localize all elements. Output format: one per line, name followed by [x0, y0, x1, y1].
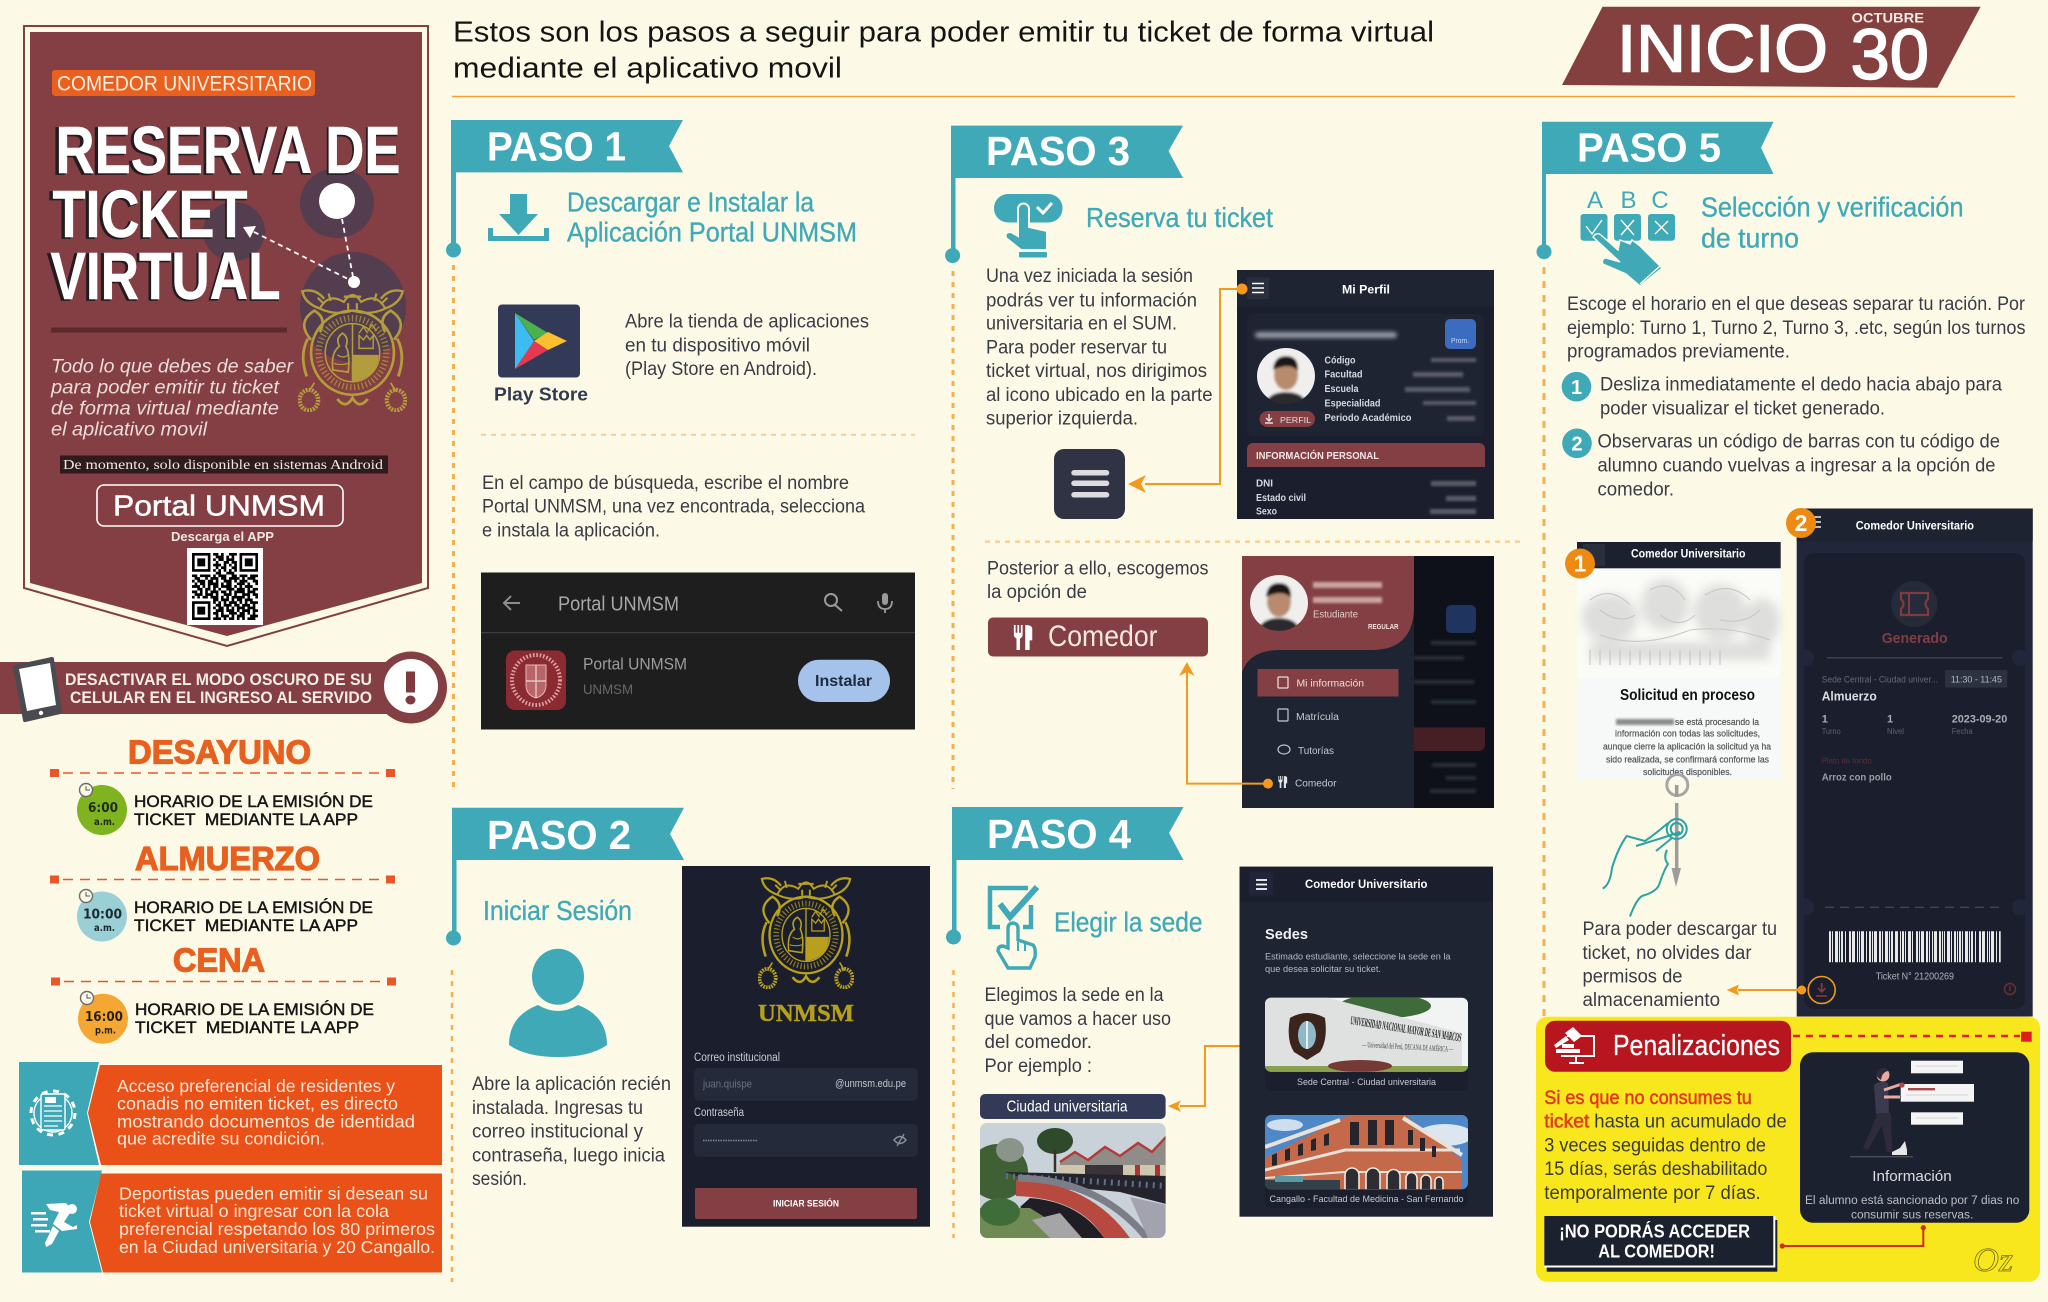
portal unmsm label — [97, 485, 343, 526]
tagline: Todo lo que debes de saber — [51, 356, 295, 378]
flag: paso 4 — [946, 807, 1184, 944]
screenshot: login: Contraseña — [694, 1107, 744, 1119]
panel: schedule almuerzo — [50, 840, 395, 942]
screenshot: request in process: aunque cierre la aplicación la solicitud ya ha — [1603, 741, 1771, 751]
text: schedule: programados previamente. — [1567, 342, 1790, 363]
screenshot: login: INICIAR SESIÓN — [773, 1198, 839, 1210]
text: profile: Para poder reservar tu — [986, 337, 1167, 358]
screenshot: profile: Facultad — [1324, 370, 1362, 381]
text: penalty rule: 3 veces seguidas dentro de — [1544, 1135, 1766, 1157]
badge: inicio octubre 30: INICIO — [1617, 12, 1828, 87]
text: penalty rule: ticket — [1544, 1111, 1590, 1133]
connector: callout to screen — [1780, 1225, 1926, 1249]
text: penalty rule: Si es que no consumes tu — [1544, 1087, 1752, 1109]
tagline — [50, 356, 295, 440]
text: profile: ticket virtual, nos dirigimos — [986, 361, 1207, 382]
screenshot: profile: INFORMACIÓN PERSONAL — [1256, 449, 1379, 462]
description — [134, 898, 373, 935]
text: conadis no emiten ticket, es directo — [117, 1094, 398, 1114]
step 2: Observaras un código de barras con tu código de — [1598, 432, 2000, 453]
callout: no access: AL COMEDOR! — [1598, 1241, 1715, 1261]
screenshot: generated ticket: Plato de fondo — [1822, 757, 1872, 766]
badge: inicio octubre 30: OCTUBRE — [1852, 10, 1924, 26]
tagline: de forma virtual mediante — [51, 398, 279, 420]
text: choose comedor: la opción de — [987, 582, 1087, 603]
time badge — [77, 784, 127, 835]
screenshot: request in process: se está procesando la — [1675, 717, 1759, 727]
heading — [1701, 192, 1964, 253]
panel: penalizaciones — [1536, 1017, 2040, 1282]
flag: paso 3 — [945, 126, 1183, 263]
icon: play store — [498, 304, 580, 378]
heading: Reserva tu ticket — [1086, 202, 1273, 233]
time badge: 6:00 — [88, 801, 118, 816]
screenshot: profile: Prom. — [1451, 338, 1469, 345]
screenshot: menu: Tutorías — [1298, 746, 1334, 757]
screenshot: generated ticket: Fecha — [1952, 727, 1973, 736]
description: TICKET MEDIANTE LA APP — [134, 917, 358, 935]
header text: Estos son los pasos a seguir para poder emitir tu ticket de forma virtual — [453, 16, 1434, 48]
text: profile: superior izquierda. — [986, 408, 1138, 430]
text: schedule — [1567, 294, 2026, 363]
photo: ciudad universitaria — [968, 1123, 1166, 1238]
step 1 — [1562, 372, 2002, 420]
arrow: download permissions — [1727, 984, 1806, 996]
screenshot: generated ticket: Almuerzo — [1822, 689, 1877, 703]
screenshot: generated ticket: Turno — [1822, 727, 1841, 736]
screenshot: generated ticket: Comedor Universitario — [1856, 521, 1974, 533]
badge 2: 2 — [1795, 510, 1807, 536]
panel: paso 2 — [446, 808, 930, 1282]
screenshot: login: juan.quispe — [702, 1079, 752, 1091]
text: en la Ciudad universitaria y 20 Cangallo. — [119, 1237, 435, 1257]
time badge: 16:00 — [85, 1010, 123, 1025]
title: RESERVA DE — [52, 114, 400, 189]
badge 1: 1 — [1574, 550, 1587, 576]
header text — [453, 16, 1434, 84]
screenshot: generated ticket: Nivel — [1887, 727, 1904, 736]
flag: paso 5 — [1536, 122, 1774, 259]
text: login: Abre la aplicación recién — [472, 1074, 671, 1095]
icon: abc choice: B — [1620, 187, 1637, 214]
text: login: instalada. Ingresas tu — [472, 1098, 643, 1119]
text: choose comedor — [987, 559, 1208, 603]
button: comedor — [988, 618, 1208, 656]
text: Deportistas pueden emitir si desean su — [119, 1184, 428, 1204]
screenshot: sedes: Sede Central - Ciudad universitaria — [1297, 1077, 1437, 1088]
screenshot: request in process: Solicitud en proceso — [1620, 687, 1755, 704]
caption: play store: Play Store — [494, 384, 588, 404]
badge 2 — [1786, 508, 1816, 538]
icon: menu button — [1054, 449, 1125, 519]
screenshot: generated ticket: Ticket N° 21200269 — [1876, 971, 1954, 982]
text: penalty rule — [1544, 1087, 1787, 1204]
text: login — [472, 1074, 671, 1190]
time badge: a.m. — [94, 923, 115, 934]
tagline: para poder emitir tu ticket — [50, 376, 281, 398]
screenshot: profile: PERFIL — [1280, 415, 1311, 425]
screenshot: generated ticket — [1797, 508, 2033, 1016]
icon: tap check — [994, 194, 1062, 258]
step 2: 2 — [1571, 434, 1583, 456]
screenshot: store search — [481, 572, 915, 730]
icon: swipe gesture — [1603, 774, 1688, 916]
text: Acceso preferencial de residentes y — [117, 1076, 395, 1096]
infographic canvas: UNIVERSIDAD NACIONAL MAYOR DE SAN MARCOS — [1350, 1013, 1462, 1045]
heading: DESAYUNO — [128, 734, 311, 770]
text: login: contraseña, luego inicia — [472, 1146, 665, 1167]
android notice: De momento, solo disponible en sistemas Android — [63, 458, 383, 473]
panel: athletes — [22, 1170, 442, 1272]
screenshot: request in process — [1577, 542, 1781, 779]
text: choose sede: Elegimos la sede en la — [984, 985, 1164, 1006]
panel: schedule desayuno — [50, 734, 395, 835]
text: profile: podrás ver tu información — [986, 290, 1197, 312]
screenshot: store search: UNMSM — [583, 681, 633, 697]
screenshot: generated ticket: Sede Central - Ciudad univer... — [1822, 674, 1938, 686]
screenshot: profile: Escuela — [1324, 384, 1359, 395]
screenshot: sedes: Comedor Universitario — [1305, 877, 1428, 891]
icon: abc choice: A — [1587, 187, 1603, 214]
panel: title banner — [24, 26, 428, 646]
icon: runner — [31, 1203, 77, 1247]
screenshot: profile — [1237, 270, 1494, 519]
screenshot: sedes: Cangallo - Facultad de Medicina - San Fernando — [1270, 1194, 1464, 1205]
alert: dark mode band — [0, 652, 447, 724]
screenshot: login: Correo institucional — [694, 1052, 780, 1064]
text: permissions: almacenamiento — [1582, 990, 1720, 1011]
step 1: 1 — [1571, 377, 1582, 399]
alert text — [65, 671, 372, 707]
icon: abc choice: C — [1651, 187, 1669, 214]
flag: paso 3: PASO 3 — [986, 128, 1130, 174]
screenshot: generated ticket: 1 — [1887, 713, 1893, 725]
band — [0, 652, 447, 724]
screen: sanction info: Información — [1872, 1168, 1952, 1185]
description: HORARIO DE LA EMISIÓN DE — [134, 898, 373, 917]
screenshot: menu: REGULAR — [1368, 624, 1398, 631]
screenshot: sedes: — Universidad del Perú, DECANA DE AMÉRICA — — [1361, 1039, 1454, 1054]
icon: person — [509, 949, 607, 1057]
portal unmsm label: Portal UNMSM — [113, 490, 325, 522]
time badge: p.m. — [95, 1026, 116, 1036]
text: choose sede: que vamos a hacer uso — [984, 1009, 1171, 1030]
description: TICKET MEDIANTE LA APP — [134, 811, 358, 829]
step 2 — [1562, 428, 2000, 501]
text: search: Portal UNMSM, una vez encontrada, selecciona — [482, 497, 865, 518]
step 1: poder visualizar el ticket generado. — [1600, 399, 1885, 420]
flag: paso 4: PASO 4 — [987, 811, 1131, 857]
title: VIRTUAL — [50, 239, 280, 314]
text: search — [482, 473, 865, 542]
screenshot: profile: Especialidad — [1324, 399, 1380, 410]
tagline: el aplicativo movil — [51, 418, 208, 440]
text: permissions: ticket, no olvides dar — [1582, 943, 1752, 964]
flag: paso 2: PASO 2 — [487, 812, 631, 858]
description — [135, 1000, 374, 1037]
heading: Aplicación Portal UNMSM — [567, 216, 857, 247]
badge: inicio octubre 30: 30 — [1850, 16, 1929, 95]
text: penalty rule: hasta un acumulado de — [1594, 1111, 1787, 1133]
text: login: correo institucional y — [472, 1122, 643, 1143]
screenshot: sedes: que desea solicitar su ticket. — [1265, 964, 1381, 975]
screenshot: login: @unmsm.edu.pe — [835, 1078, 906, 1090]
text: choose sede — [984, 985, 1171, 1077]
step 2: comedor. — [1598, 480, 1674, 501]
flag: paso 1: PASO 1 — [487, 124, 626, 170]
icon: download — [488, 194, 549, 241]
heading — [567, 187, 857, 247]
screenshot: sedes: Sedes — [1265, 926, 1308, 943]
text — [119, 1184, 435, 1257]
header: penalizaciones: Penalizaciones — [1613, 1030, 1780, 1062]
screenshot: request in process: sido realizada, se confirmará conforme las — [1606, 755, 1769, 765]
banner shape — [24, 26, 428, 646]
screenshot: sedes — [1240, 867, 1493, 1217]
screenshot: store search: Instalar — [815, 673, 872, 690]
text: permissions — [1582, 919, 1777, 1011]
heading: ALMUERZO — [135, 840, 320, 877]
alert text: CELULAR EN EL INGRESO AL SERVIDO — [70, 689, 372, 707]
arrow: menu to button — [1128, 284, 1248, 493]
text: penalty rule: temporalmente por 7 días. — [1544, 1182, 1761, 1204]
callout: no access — [1544, 1216, 1777, 1272]
text: profile: Una vez iniciada la sesión — [986, 266, 1193, 287]
screenshot: generated ticket: 2023-09-20 — [1952, 713, 2007, 725]
screenshot: generated ticket: 1 — [1822, 713, 1828, 725]
text: search: En el campo de búsqueda, escribe el nombre — [482, 473, 849, 494]
text: open store — [625, 312, 869, 380]
screenshot: menu — [1242, 556, 1494, 808]
heading: Iniciar Sesión — [483, 895, 632, 926]
icon: gear document — [31, 1091, 75, 1135]
decorative circles — [203, 168, 406, 362]
text: open store: (Play Store en Android). — [625, 359, 817, 380]
title: TICKET — [52, 177, 248, 252]
text: preferencial respetando los 80 primeros — [119, 1219, 435, 1239]
text: open store: Abre la tienda de aplicaciones — [625, 312, 869, 332]
step 2: alumno cuando vuelvas a ingresar a la opción de — [1598, 456, 1996, 477]
panel: schedule cena — [51, 942, 396, 1044]
step 1: Desliza inmediatamente el dedo hacia abajo para — [1600, 375, 2002, 396]
screenshot: store search: Portal UNMSM — [583, 654, 687, 674]
text: ticket virtual o ingresar con la cola — [119, 1201, 389, 1221]
panel: paso 4 — [946, 807, 1493, 1238]
text: profile: al icono ubicado en la parte — [986, 385, 1212, 406]
badge: inicio octubre 30 — [1562, 7, 1981, 95]
screenshot: store search: Portal UNMSM — [558, 593, 679, 616]
alert text: DESACTIVAR EL MODO OSCURO DE SU — [65, 671, 372, 689]
download caption: Descarga el APP — [171, 530, 274, 544]
time badge — [77, 890, 127, 942]
screenshot: generated ticket: Arroz con pollo — [1822, 772, 1892, 784]
button: comedor: Comedor — [1048, 620, 1158, 653]
text: penalty rule: 15 días, serás deshabilitado — [1544, 1158, 1767, 1180]
header text: mediante el aplicativo movil — [453, 52, 842, 84]
flag: paso 5: PASO 5 — [1577, 125, 1721, 171]
heading: Selección y verificación — [1701, 192, 1964, 223]
description — [134, 792, 373, 829]
panel: paso 5 — [1536, 122, 2033, 1018]
time badge — [78, 992, 128, 1044]
screenshot: generated ticket: 11:30 - 11:45 — [1951, 674, 2002, 686]
tag: comedor universitario: COMEDOR UNIVERSITARIO — [57, 72, 312, 96]
screenshot: sedes: Estimado estudiante, seleccione la sede en la — [1265, 951, 1451, 962]
flag: paso 1 — [446, 120, 683, 258]
screenshot: profile: Periodo Académico — [1324, 413, 1412, 424]
text: choose comedor: Posterior a ello, escogemos — [987, 559, 1208, 580]
description: HORARIO DE LA EMISIÓN DE — [135, 1000, 374, 1019]
screenshot: login: UNMSM — [758, 1001, 854, 1027]
arrow: comedor to button — [1179, 662, 1273, 789]
screenshot: menu: Mi información — [1296, 679, 1364, 690]
label: ciudad universitaria — [980, 1094, 1166, 1119]
screenshot: profile: Mi Perfil — [1342, 283, 1390, 297]
icon: abc choice — [1580, 187, 1675, 286]
screenshot: menu: Matrícula — [1296, 712, 1339, 723]
screenshot: profile: Estado civil — [1256, 493, 1306, 504]
panel: paso 3 — [945, 126, 1524, 808]
text: mostrando documentos de identidad — [117, 1112, 415, 1132]
screenshot: profile: Sexo — [1256, 507, 1277, 518]
heading: Elegir la sede — [1054, 907, 1202, 938]
description: HORARIO DE LA EMISIÓN DE — [134, 792, 373, 811]
badge 1 — [1565, 548, 1595, 578]
screenshot: request in process: información con todas las solicitudes, — [1615, 729, 1760, 739]
title — [48, 113, 400, 315]
header: penalizaciones — [1545, 1021, 1791, 1072]
screen: sanction info — [1800, 1052, 2029, 1223]
text: permissions: permisos de — [1582, 967, 1682, 988]
qr code — [187, 548, 263, 625]
flag: paso 2 — [446, 808, 684, 946]
icon: phone — [15, 659, 60, 720]
screenshot: login — [682, 866, 930, 1227]
time badge: a.m. — [94, 817, 115, 828]
text — [117, 1076, 415, 1148]
signature: Oz — [1973, 1242, 2013, 1279]
screenshot: menu: Estudiante — [1313, 610, 1358, 620]
screen: sanction info: El alumno está sancionado por 7 dias no — [1805, 1195, 2019, 1207]
text: open store: en tu dispositivo móvil — [625, 336, 810, 356]
panel: preferential access — [19, 1062, 442, 1165]
text: schedule: ejemplo: Turno 1, Turno 2, Turno 3, .etc, según los turnos — [1567, 318, 2026, 339]
arrow: sede — [1168, 1042, 1264, 1112]
screenshot: request in process: Comedor Universitario — [1631, 548, 1746, 560]
text: choose sede: del comedor. — [984, 1032, 1092, 1053]
text: que acredite su condición. — [117, 1128, 325, 1148]
time badge: 10:00 — [83, 908, 122, 922]
icon: check and hand — [990, 887, 1037, 968]
shapes — [22, 1170, 442, 1272]
screenshot: profile: Código — [1324, 356, 1356, 366]
text: profile: universitaria en el SUM. — [986, 314, 1177, 334]
title: RESERVA DE — [56, 113, 400, 188]
shapes — [19, 1062, 442, 1165]
heading: CENA — [173, 942, 265, 978]
icon: university crest — [298, 289, 407, 412]
screen: sanction info: consumir sus reservas. — [1851, 1209, 1973, 1221]
panel: paso 1 — [446, 120, 915, 790]
screenshot: profile: DNI — [1256, 478, 1273, 490]
screenshot: generated ticket: Generado — [1882, 630, 1948, 647]
heading: Descargar e Instalar la — [567, 187, 814, 218]
text: permissions: Para poder descargar tu — [1582, 919, 1777, 940]
title: VIRTUAL — [48, 240, 280, 315]
text: search: e instala la aplicación. — [482, 521, 660, 542]
callout: no access: ¡NO PODRÁS ACCEDER — [1559, 1220, 1750, 1241]
title: TICKET — [50, 178, 247, 253]
label: ciudad universitaria: Ciudad universitaria — [1006, 1099, 1128, 1116]
screenshot: menu: Comedor — [1295, 778, 1337, 789]
heading: de turno — [1701, 222, 1799, 253]
description: TICKET MEDIANTE LA APP — [135, 1019, 359, 1037]
icon: exclamation — [384, 659, 438, 713]
text: login: sesión. — [472, 1169, 527, 1190]
screenshot: request in process: solicitudes disponibles. — [1643, 767, 1732, 777]
text: schedule: Escoge el horario en el que deseas separar tu ración. Por — [1567, 294, 2026, 315]
text: choose sede: Por ejemplo : — [984, 1056, 1092, 1077]
text: profile — [986, 266, 1212, 430]
